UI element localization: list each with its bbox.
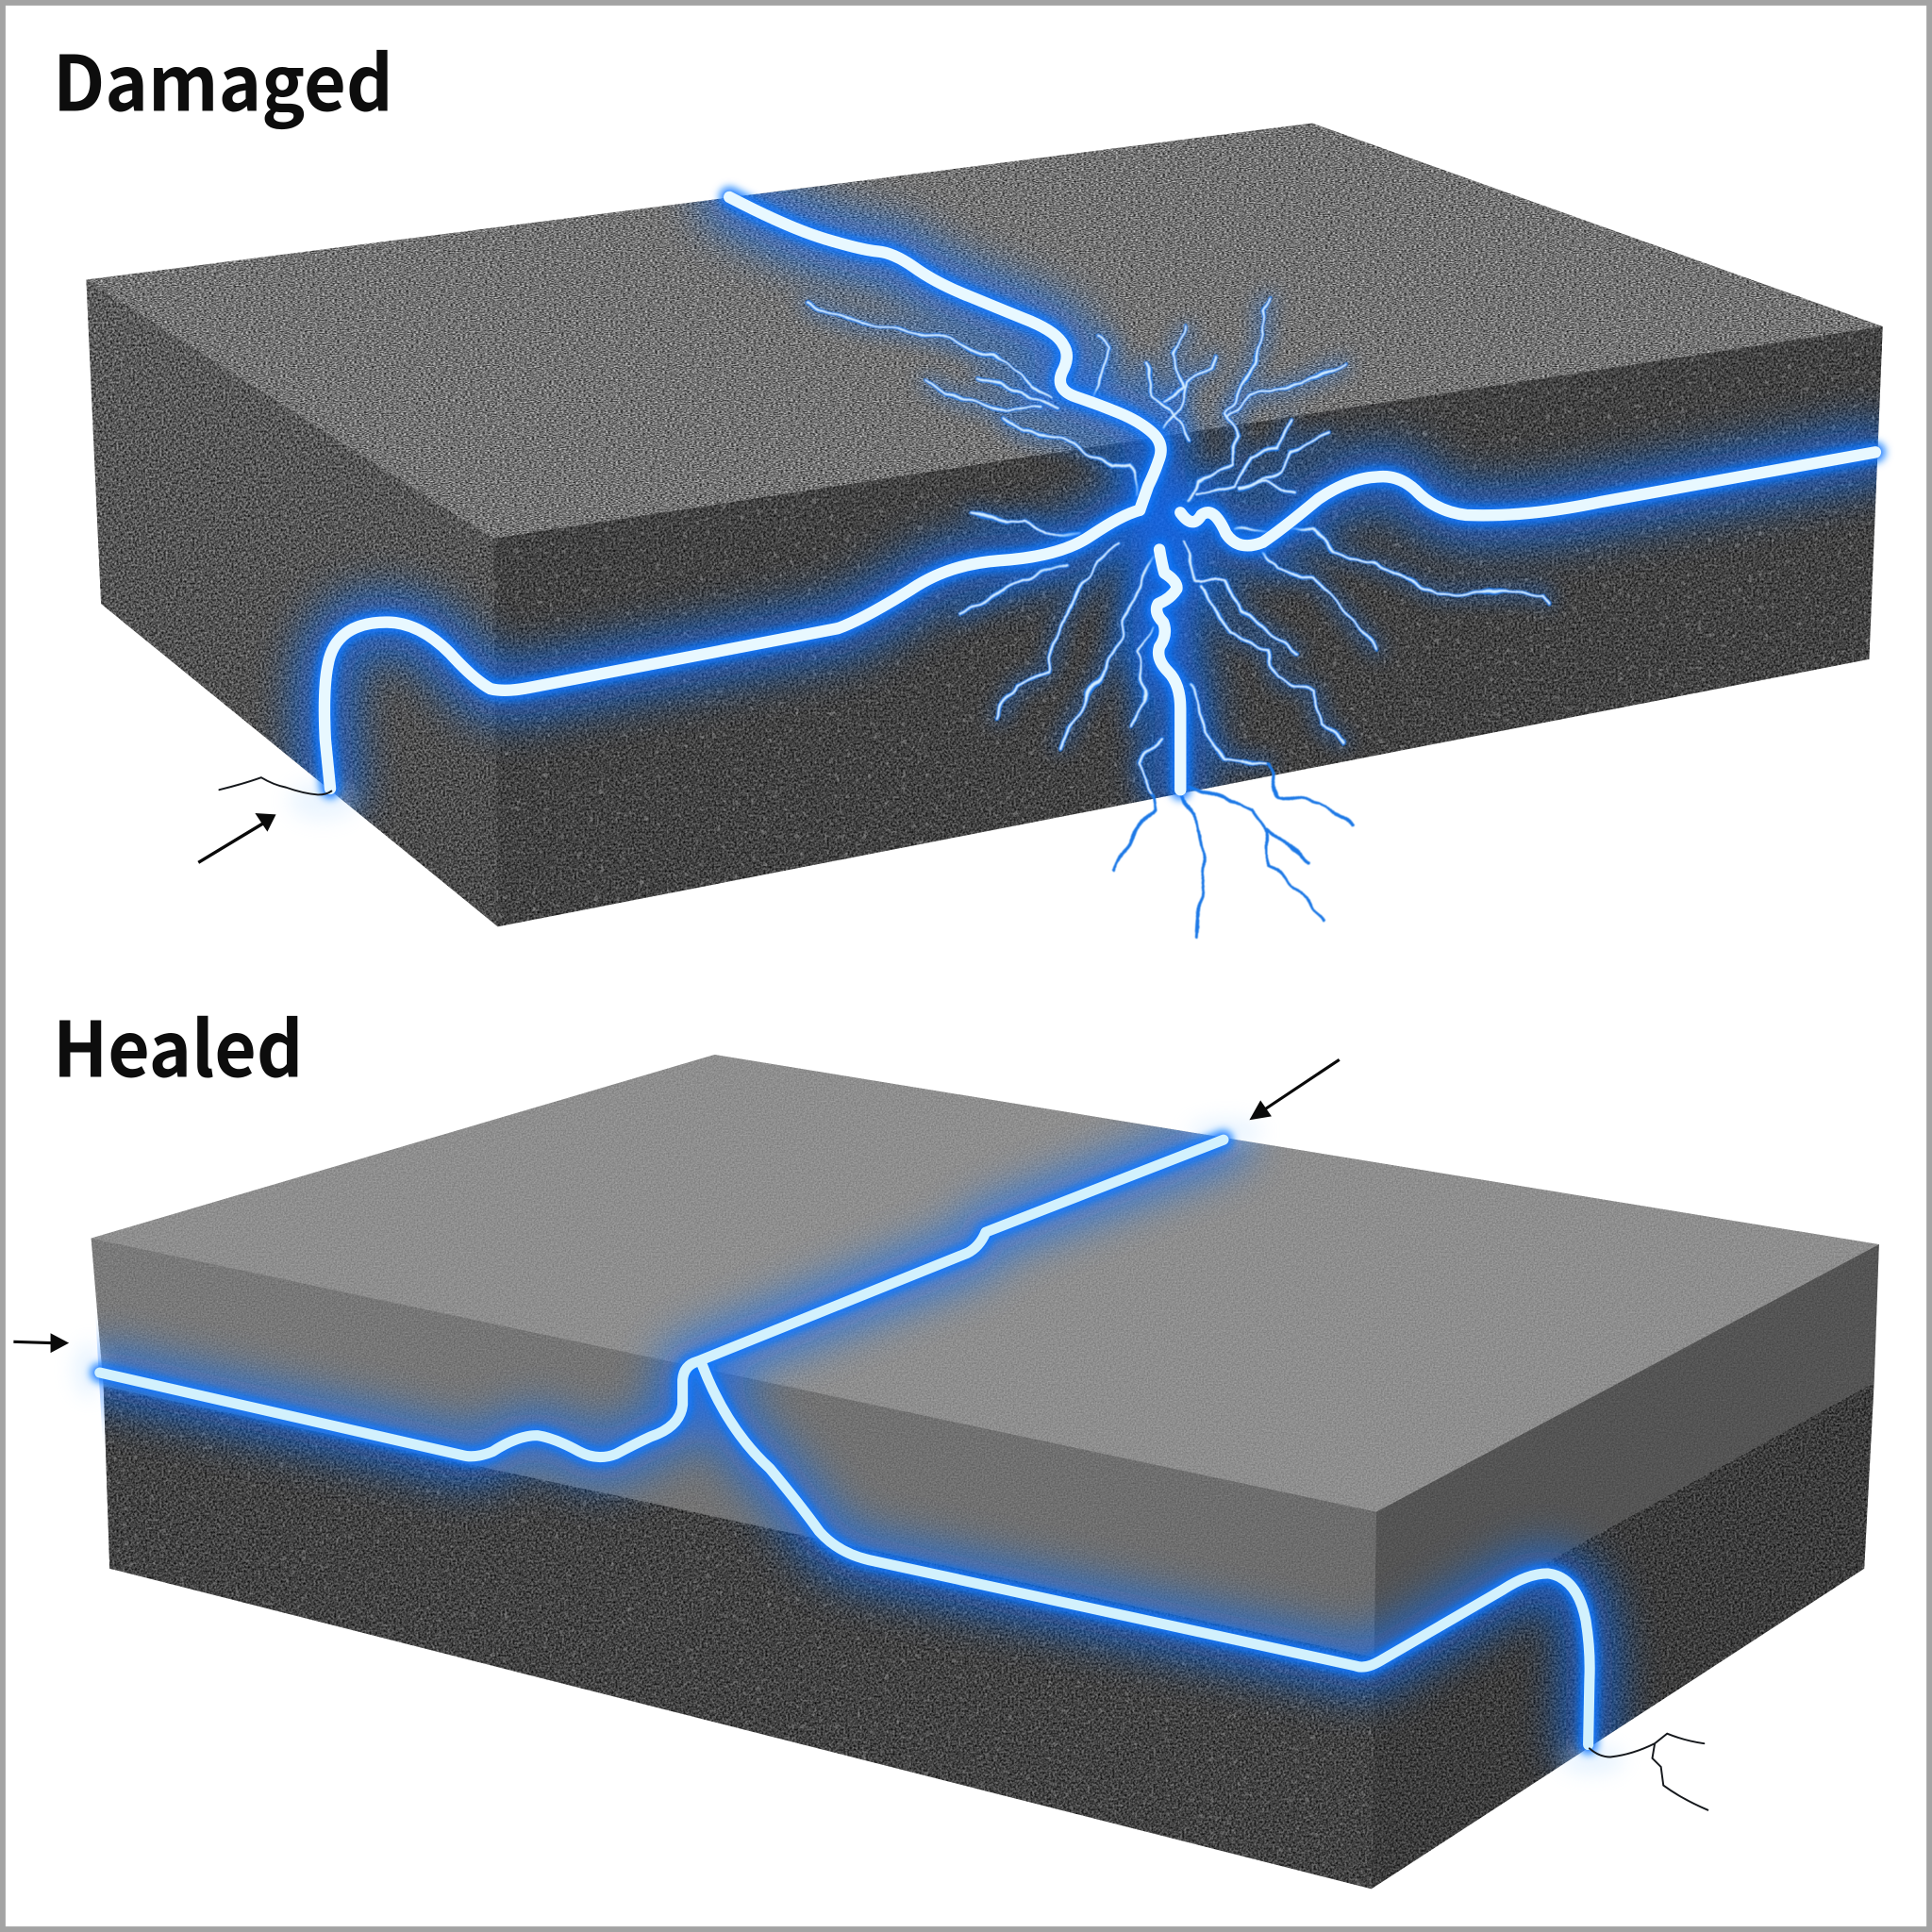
healed slab: short side upper band (1374, 1244, 1879, 1657)
faint halos at crack mouths (74, 1119, 1624, 1774)
arrow: healed crack left (13, 1333, 69, 1353)
damaged slab: left face (86, 279, 498, 926)
crack glow: damaged (325, 197, 1875, 794)
heading: Healed: Healed (53, 990, 303, 1100)
healed slab: long side upper band (92, 1239, 1376, 1657)
panel: healed slab (13, 1055, 1879, 1889)
healed slab: long side lower band (104, 1386, 1374, 1889)
gravel specks: healed (104, 1386, 1374, 1889)
heading: Damaged: Damaged (53, 24, 393, 134)
damaged slab: front face (492, 326, 1883, 926)
hairline crack: healed (1590, 1734, 1707, 1810)
healed slab: short side lower band (1372, 1382, 1874, 1889)
arrow: damaged crack origin (198, 813, 276, 862)
gravel specks: damaged (492, 326, 1883, 926)
arrow: healed crack top (1249, 1059, 1340, 1120)
crack glow: healed (100, 1140, 1590, 1744)
healed slab: top face (92, 1055, 1879, 1512)
main blue crack: healed (100, 1140, 1590, 1744)
main blue crack: damaged (325, 197, 1875, 790)
panel: damaged slab (86, 124, 1883, 939)
hairline crack: damaged (219, 777, 331, 794)
fine branching cracks: damaged (808, 298, 1549, 939)
damaged slab: top face (86, 124, 1883, 539)
faint halo at crack mouth (289, 781, 358, 821)
